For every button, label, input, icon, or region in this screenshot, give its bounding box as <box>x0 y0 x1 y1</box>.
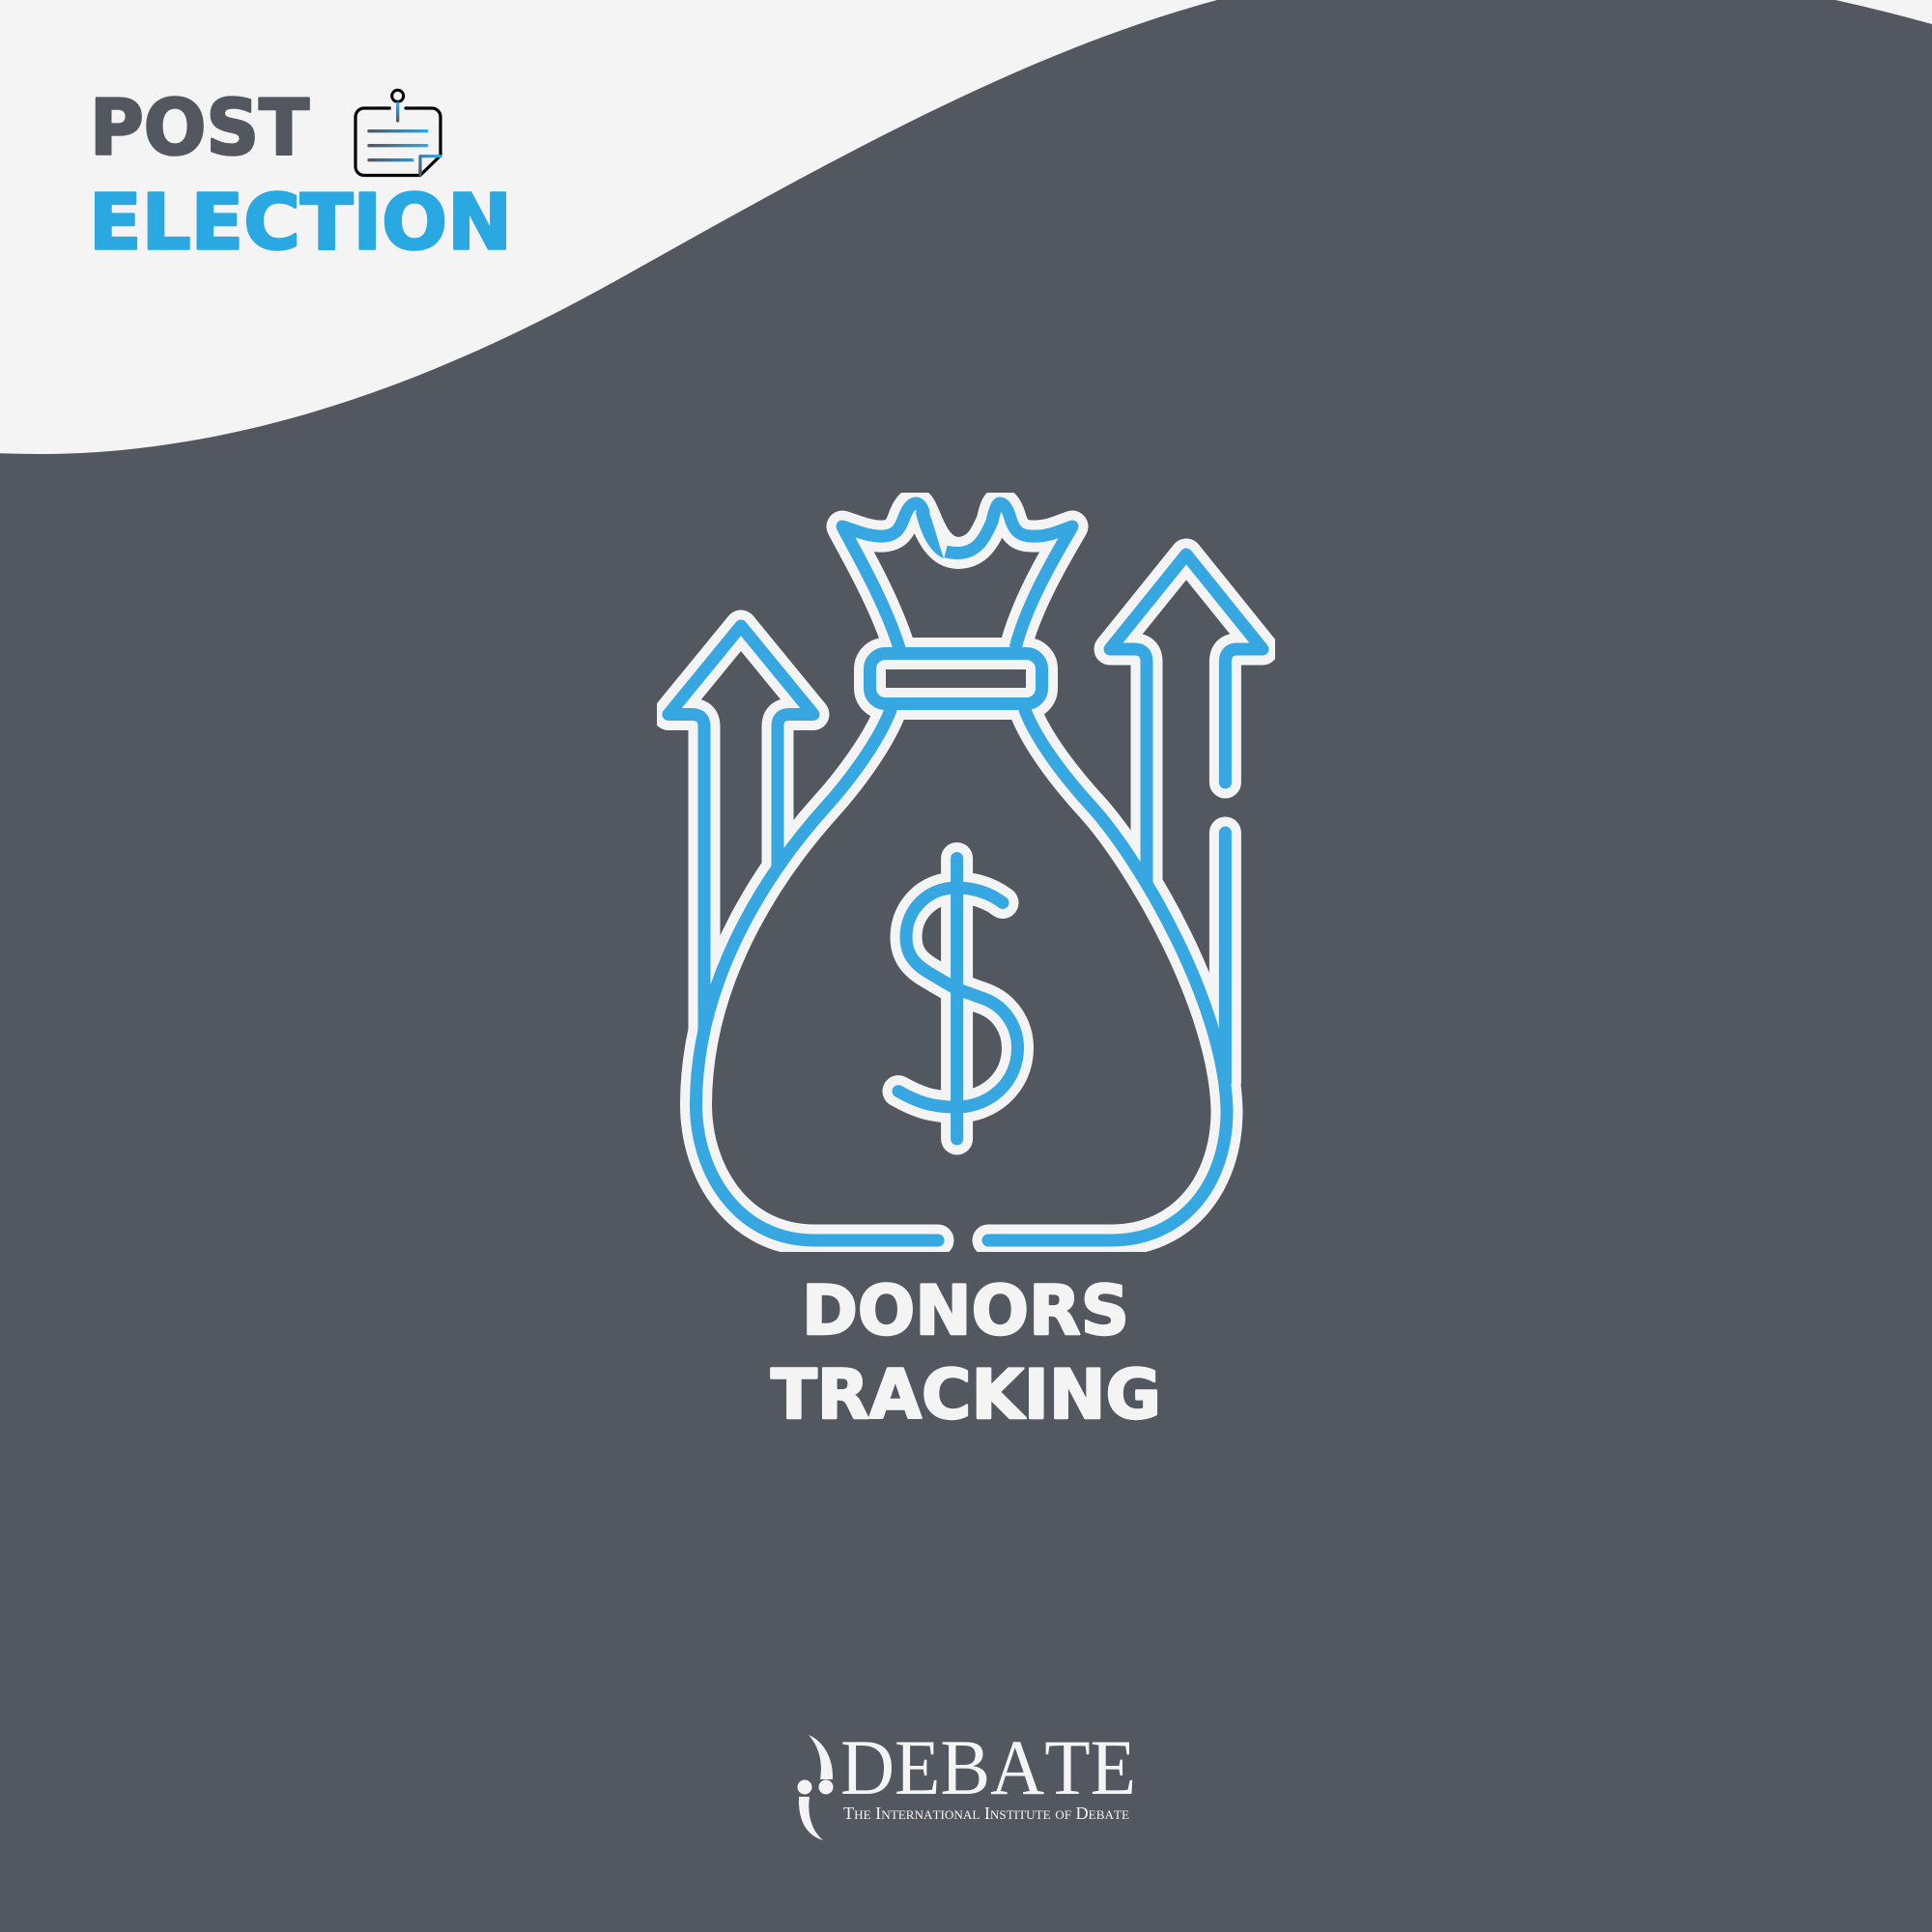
icon white outline <box>668 503 1263 1240</box>
note text lines <box>369 131 427 160</box>
note outline <box>355 108 440 176</box>
caption: donors tracking <box>771 1271 1161 1435</box>
heading word: POST: POST <box>90 83 309 172</box>
caption line: DONORS: DONORS <box>802 1271 1129 1350</box>
page fold <box>420 156 440 175</box>
icon blue line work <box>668 499 1263 1240</box>
icon: pinned note <box>355 90 440 176</box>
caption line: TRACKING: TRACKING <box>771 1355 1161 1435</box>
logo: iDebate <box>798 1723 1136 1840</box>
logo wordmark: DEBATE <box>840 1723 1136 1811</box>
logo mark <box>798 1735 833 1840</box>
heading: post election <box>89 83 512 267</box>
icon: money bag with rising arrows <box>668 499 1263 1240</box>
heading word: ELECTION: ELECTION <box>89 178 512 267</box>
logo tagline: The International Institute of Debate <box>843 1804 1129 1823</box>
light wave corner top right <box>1835 0 1932 24</box>
pin head <box>392 90 404 101</box>
pin stem <box>396 103 399 121</box>
light wave top left <box>0 0 1217 454</box>
